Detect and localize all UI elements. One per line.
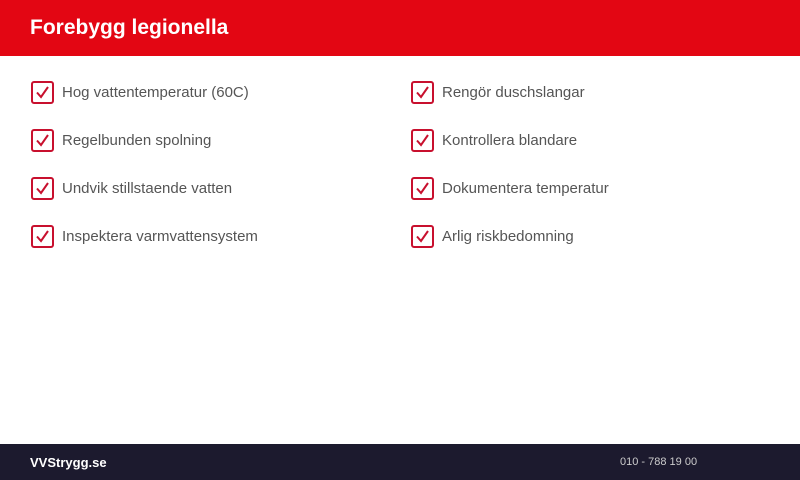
item: Kontrollera blandare: Kontrollera blandare xyxy=(442,132,577,149)
footer xyxy=(0,444,800,480)
footer: 010 - 788 19 00 xyxy=(620,456,697,468)
item: Arlig riskbedomning: Arlig riskbedomning xyxy=(442,228,574,245)
item: Inspektera varmvattensystem: Inspektera varmvattensystem xyxy=(62,228,258,245)
footer: VVStrygg.se xyxy=(30,455,107,470)
item: Undvik stillstaende vatten: Undvik stillstaende vatten xyxy=(62,180,232,197)
item: Dokumentera temperatur: Dokumentera temperatur xyxy=(442,180,609,197)
item: Inspektera varmvattensystem xyxy=(31,225,258,248)
item: Regelbunden spolning xyxy=(31,129,211,152)
item: Undvik stillstaende vatten xyxy=(31,177,232,200)
item: Hog vattentemperatur: Hog vattentemperatur (60C) xyxy=(62,84,249,101)
item: Regelbunden spolning: Regelbunden spolning xyxy=(62,132,211,149)
item: Rengör duschslangar xyxy=(411,81,585,104)
item: Hog vattentemperatur xyxy=(31,81,249,104)
item: Rengör duschslangar: Rengör duschslangar xyxy=(442,84,585,101)
header xyxy=(0,0,800,56)
header: Forebygg legionella xyxy=(30,16,228,39)
item: Kontrollera blandare xyxy=(411,129,577,152)
item: Arlig riskbedomning xyxy=(411,225,574,248)
item: Dokumentera temperatur xyxy=(411,177,609,200)
